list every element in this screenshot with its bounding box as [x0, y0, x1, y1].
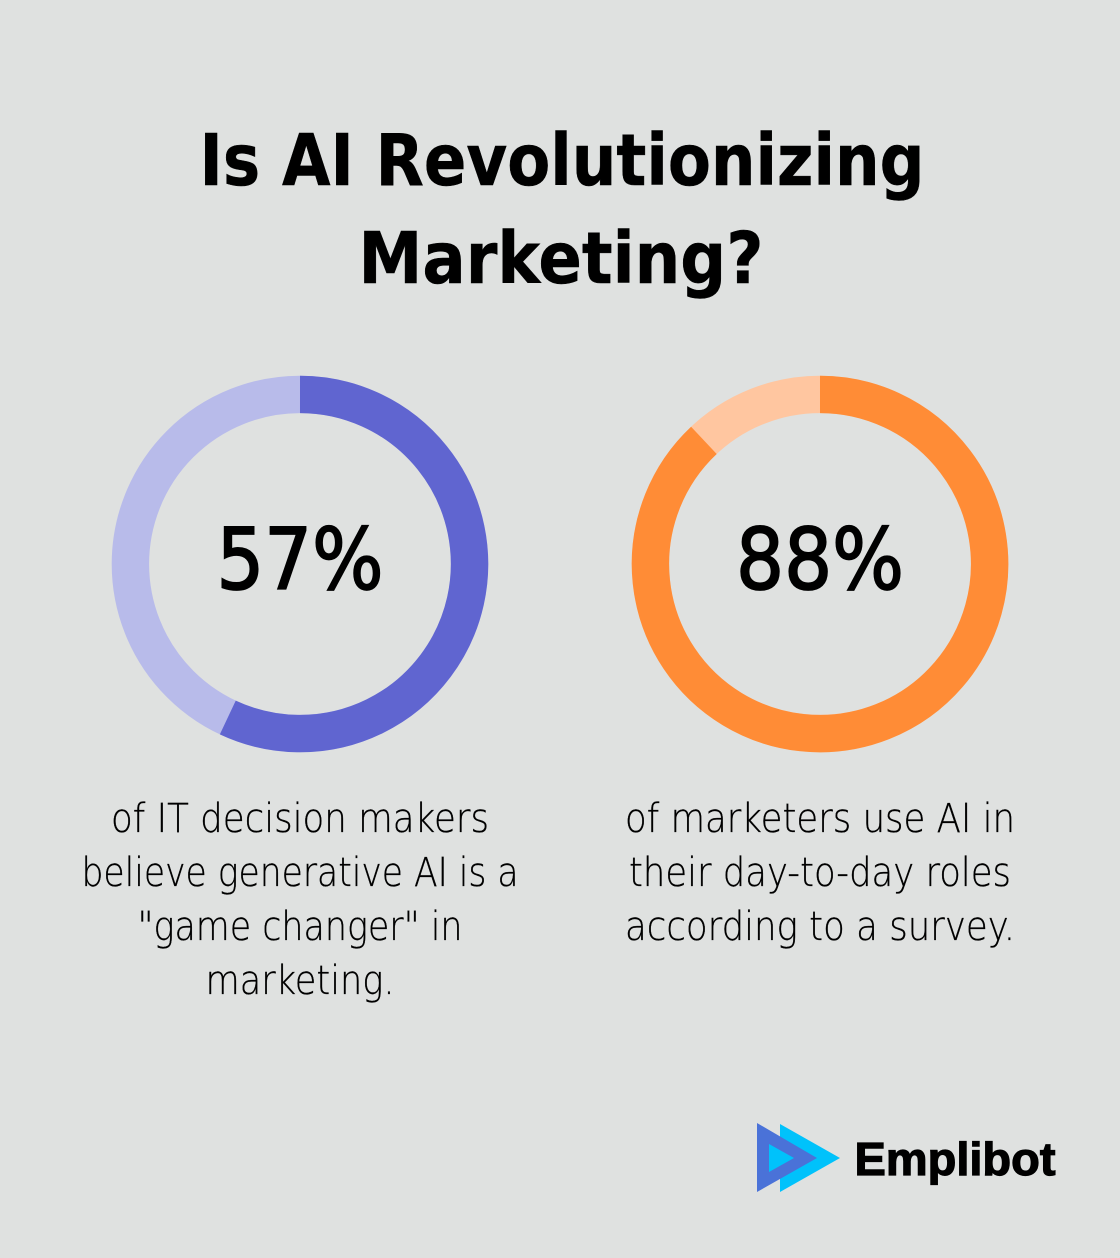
description: IT decision makers: "game changer" in — [138, 904, 462, 950]
icon: play triangles — [757, 1123, 840, 1192]
wordmark: Emplibot — [854, 1133, 1056, 1185]
description: marketers: their day-to-day roles — [629, 850, 1011, 896]
title: Is AI Revolutionizing — [200, 119, 924, 202]
description: IT decision makers: marketing. — [206, 958, 394, 1004]
logo: Emplibot — [757, 1123, 1056, 1192]
description: IT decision makers: believe generative AI is a — [82, 850, 518, 896]
description: marketers: according to a survey. — [625, 904, 1015, 950]
description: marketers — [625, 796, 1015, 950]
panel: 88% statistic — [625, 394, 1015, 950]
title — [200, 119, 924, 300]
title: Marketing? — [358, 217, 764, 300]
description: marketers: of marketers use AI in — [625, 796, 1015, 842]
donut chart: 88% — [650, 394, 990, 734]
value: 57%: 57% — [216, 511, 384, 610]
description: IT decision makers — [82, 796, 518, 1004]
value: 88%: 88% — [736, 511, 904, 610]
description: IT decision makers: of IT decision makers — [111, 796, 489, 842]
donut chart: 57% — [130, 394, 470, 734]
panel: 57% statistic — [82, 394, 518, 1004]
